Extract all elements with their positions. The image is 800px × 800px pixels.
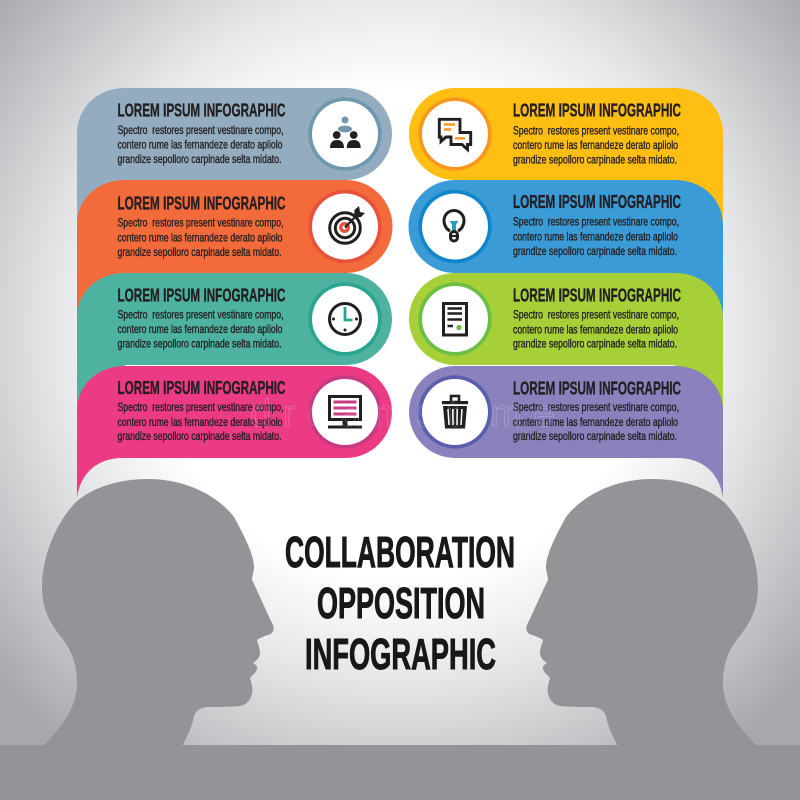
text block: grandize sepolloro carpinade selta midato.: [513, 337, 677, 351]
ground bar: [0, 745, 800, 800]
text block: Spectro restores present vestinare compo,: [118, 400, 284, 414]
text block: Spectro restores present vestinare compo,: [513, 308, 679, 322]
text block: Spectro restores present vestinare compo,: [118, 307, 284, 321]
text block: [118, 400, 284, 443]
icon: monitor: [328, 396, 362, 428]
panel: left 3: [77, 273, 392, 420]
text block: contero rume las fernandeze derato apliolo: [513, 322, 678, 336]
panel: right 1: [409, 88, 723, 240]
title: INFOGRAPHIC: [305, 630, 496, 679]
text block: Spectro restores present vestinare compo,: [513, 214, 679, 228]
text block: [513, 308, 679, 351]
text block: Spectro restores present vestinare compo,: [118, 216, 284, 230]
text block: contero rume las fernandeze derato apliolo: [118, 230, 283, 244]
text block: grandize sepolloro carpinade selta midato.: [513, 152, 677, 166]
text block: contero rume las fernandeze derato apliolo: [118, 138, 283, 152]
text block: contero rume las fernandeze derato apliolo: [513, 138, 678, 152]
panel: right 2: [408, 180, 723, 330]
text block: [513, 123, 679, 166]
text block: grandize sepolloro carpinade selta midato.: [513, 429, 677, 443]
left head silhouette: [42, 479, 274, 746]
panel: right 4: [409, 366, 723, 498]
right head silhouette: [526, 479, 758, 746]
heading: LOREM IPSUM INFOGRAPHIC: [513, 100, 681, 121]
panel: left 4: [77, 366, 392, 498]
text block: grandize sepolloro carpinade selta midato.: [118, 337, 282, 351]
text block: Spectro restores present vestinare compo,: [513, 123, 679, 137]
text block: grandize sepolloro carpinade selta midato.: [118, 152, 282, 166]
watermark: dreamstime: [250, 393, 555, 435]
icon: target: [330, 206, 365, 243]
heading: LOREM IPSUM INFOGRAPHIC: [118, 192, 286, 214]
icon: chat bubbles: [439, 119, 471, 150]
text block: contero rume las fernandeze derato apliolo: [118, 322, 283, 336]
icon: clock: [330, 304, 360, 334]
icon: trash can: [442, 396, 468, 428]
text block: grandize sepolloro carpinade selta midato.: [118, 245, 282, 259]
panel: left 1: [77, 88, 392, 240]
heading: LOREM IPSUM INFOGRAPHIC: [513, 285, 681, 306]
text block: contero rume las fernandeze derato apliolo: [118, 415, 283, 429]
text block: contero rume las fernandeze derato apliolo: [513, 230, 678, 244]
icon: people: [330, 116, 361, 148]
heading: LOREM IPSUM INFOGRAPHIC: [513, 377, 681, 398]
icon: light bulb: [444, 211, 464, 241]
text block: Spectro restores present vestinare compo,: [118, 123, 284, 137]
panel: left 2: [77, 180, 393, 330]
title: COLLABORATION: [285, 528, 515, 577]
heading: LOREM IPSUM INFOGRAPHIC: [513, 191, 681, 212]
text block: [118, 216, 284, 259]
heading: LOREM IPSUM INFOGRAPHIC: [118, 285, 286, 306]
heading: LOREM IPSUM INFOGRAPHIC: [118, 377, 286, 398]
text block: Spectro restores present vestinare compo,: [513, 400, 679, 414]
text block: grandize sepolloro carpinade selta midato.: [118, 429, 282, 443]
text block: contero rume las fernandeze derato apliolo: [513, 415, 678, 429]
icon: document: [444, 304, 466, 335]
text block: [118, 123, 284, 166]
title: OPPOSITION: [317, 579, 485, 628]
text block: grandize sepolloro carpinade selta midato.: [513, 244, 677, 258]
heading: LOREM IPSUM INFOGRAPHIC: [118, 100, 286, 121]
text block: [118, 307, 284, 351]
title: [285, 528, 515, 679]
text block: [513, 400, 679, 443]
panel: right 3: [409, 273, 723, 420]
text block: [513, 214, 679, 258]
